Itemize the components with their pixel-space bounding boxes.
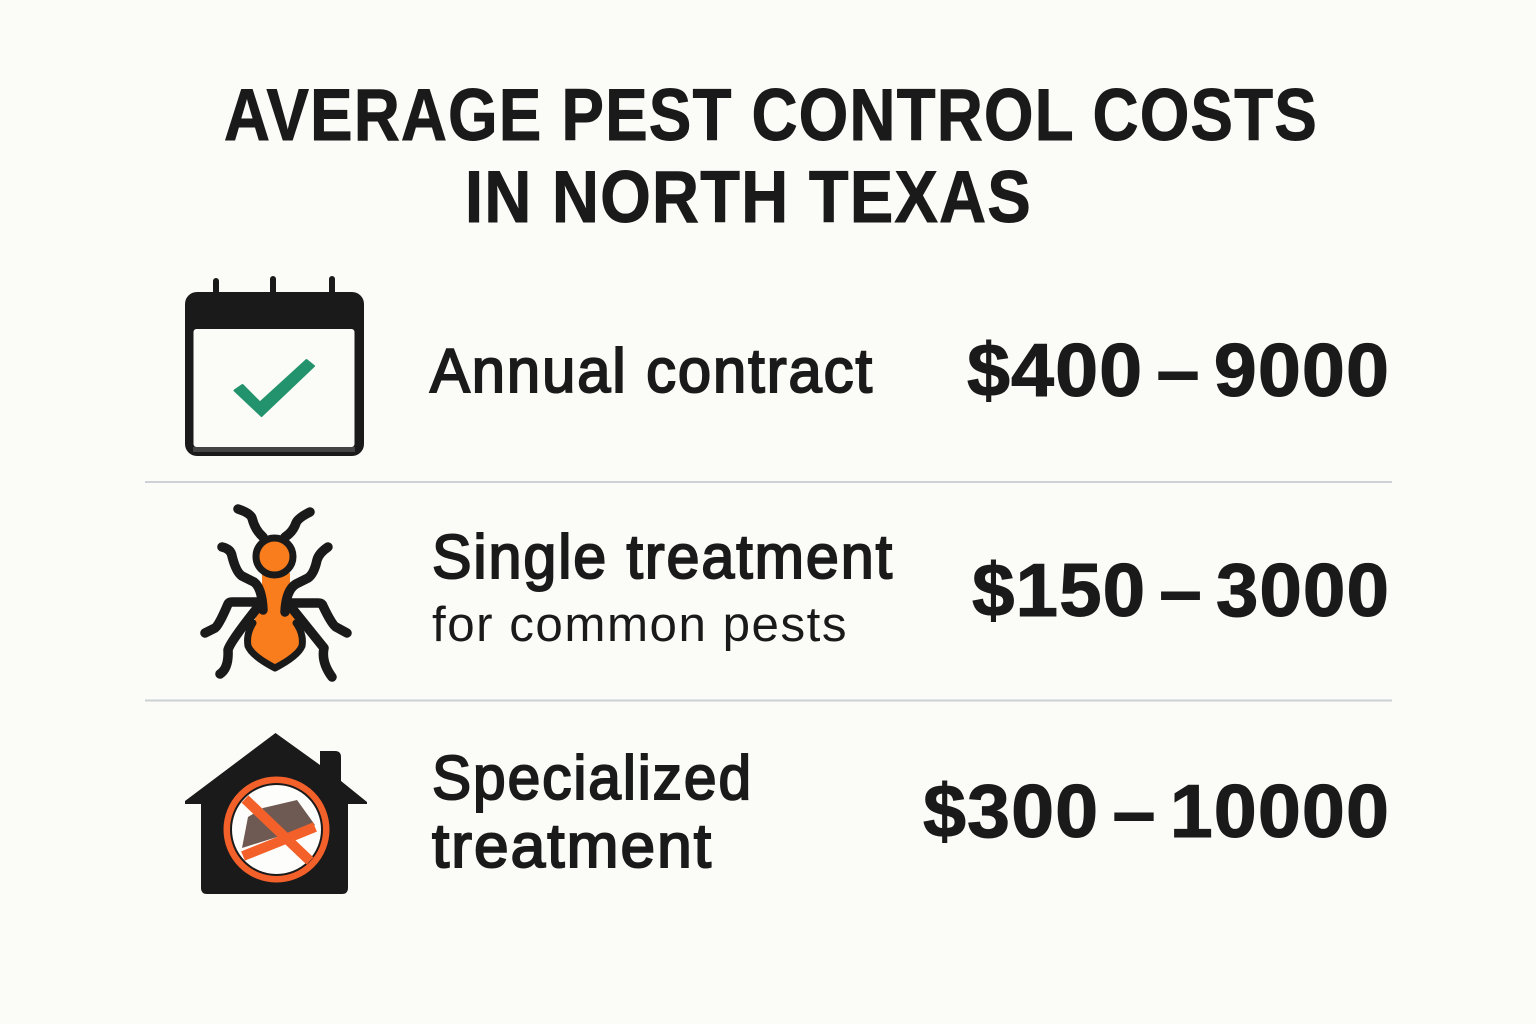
title: AVERAGE PEST CONTROL COSTS: [224, 75, 1318, 156]
label: specialized treatment: [432, 744, 753, 881]
label: single treatment: for common pests: [432, 598, 848, 652]
title: IN NORTH TEXAS: [465, 157, 1032, 238]
label: specialized treatment: treatment: [432, 812, 713, 881]
label: annual contract: Annual contract: [430, 337, 874, 406]
price: specialized treatment: $300 – 10000: [923, 769, 1390, 853]
price: single treatment: $150 – 3000: [972, 548, 1390, 632]
icon: calendar with check mark: [185, 279, 364, 456]
icon: ant: [205, 509, 347, 677]
label: specialized treatment: Specialized: [432, 744, 753, 813]
label: single treatment: [432, 523, 894, 652]
label: single treatment: Single treatment: [432, 523, 894, 592]
icon: house with crossed-out pest: [185, 733, 367, 894]
title: [224, 75, 1318, 238]
price: annual contract: $400 – 9000: [967, 328, 1390, 412]
